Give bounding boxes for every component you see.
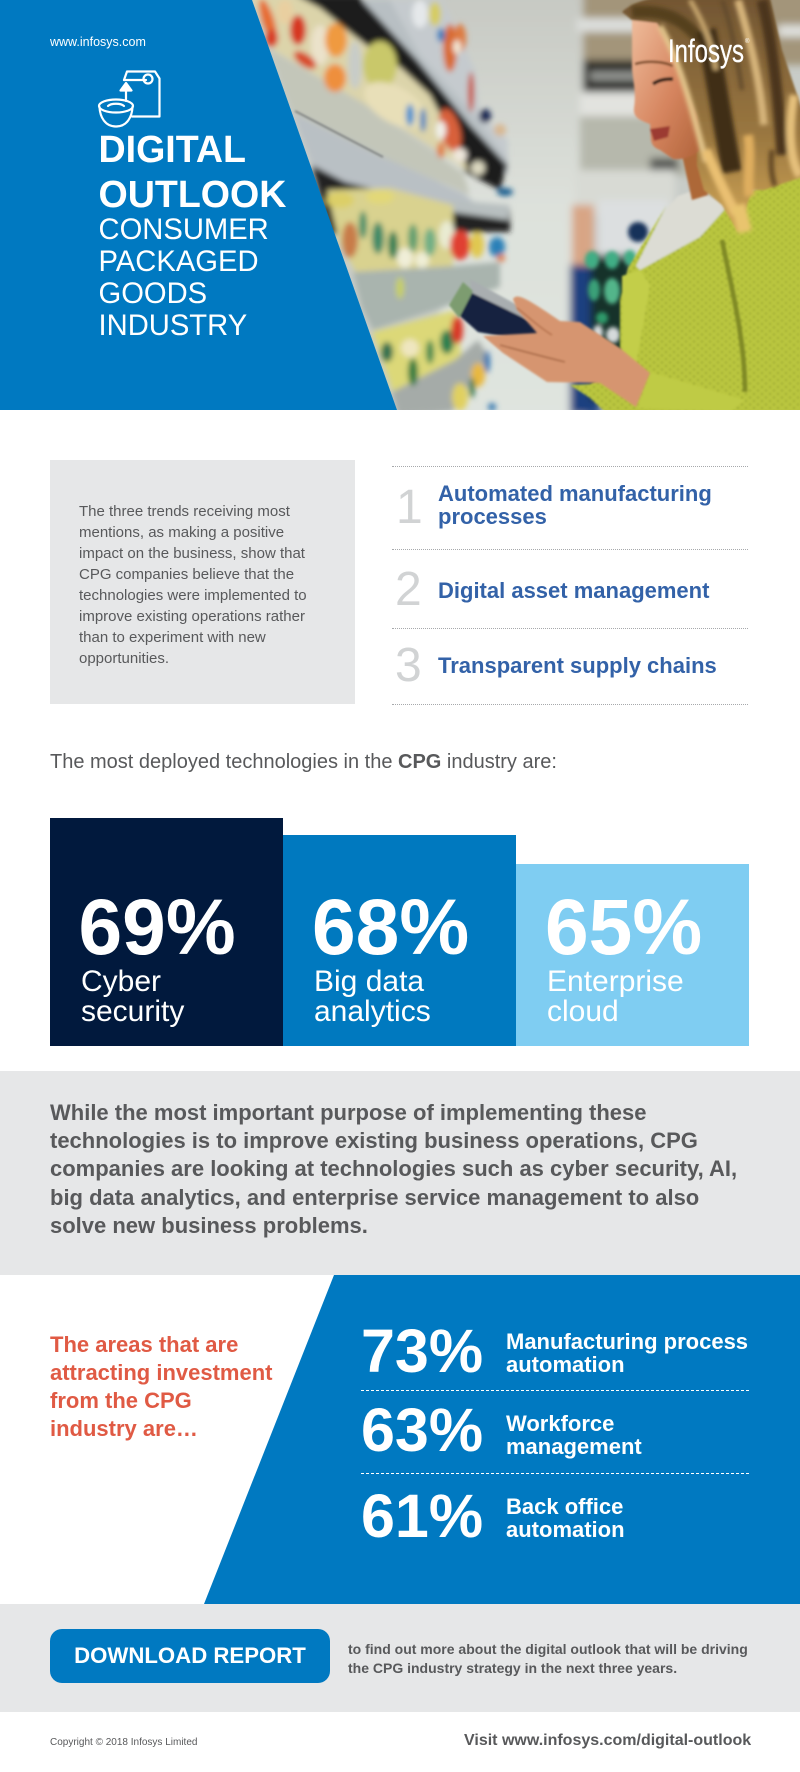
intro paragraph: technologies were implemented to [79, 587, 307, 604]
callout: areas attracting investment: The areas that are [50, 1332, 238, 1357]
stat: workforce management [361, 1396, 642, 1464]
trend 2 [395, 563, 710, 616]
stat: back office automation [361, 1482, 625, 1550]
call to action text [348, 1641, 748, 1676]
intro paragraph: CPG companies believe that the [79, 566, 294, 583]
bar: big data analytics 68%: analytics [314, 995, 431, 1028]
callout: areas attracting investment: from the CPG [50, 1388, 192, 1413]
figure: woman in yellow cardigan [449, 0, 800, 412]
trend 3: 3 [395, 639, 422, 692]
insight text: While the most important purpose of implementing these [50, 1100, 646, 1125]
insight text: big data analytics, and enterprise service management to also [50, 1185, 699, 1210]
intro paragraph: The three trends receiving most [79, 503, 290, 520]
title: INDUSTRY [98, 310, 247, 342]
panel: intro text box [50, 460, 355, 704]
stat: back office automation: automation [506, 1516, 625, 1542]
trend 2: Digital asset management [438, 578, 709, 603]
trend 1 [396, 481, 712, 534]
call to action text: the CPG industry strategy in the next three years. [348, 1660, 677, 1676]
bar: cyber security 69% [50, 818, 283, 1046]
bar: cyber security 69%: security [81, 995, 184, 1028]
heading: most deployed technologies: The most deployed technologies in the CPG industry are: [50, 751, 557, 773]
intro paragraph: mentions, as making a positive [79, 524, 284, 541]
trend 1: 1 [396, 481, 423, 534]
title [98, 128, 286, 342]
button: download report: DOWNLOAD REPORT [74, 1643, 306, 1668]
callout: areas attracting investment: attracting investment [50, 1360, 272, 1385]
callout: areas attracting investment [50, 1332, 272, 1441]
logo: Infosys: Infosys [668, 33, 744, 69]
title: CONSUMER [98, 214, 269, 246]
bar: enterprise cloud 65%: 65% [545, 883, 702, 971]
intro paragraph [79, 503, 307, 667]
panel: ranked trends list [392, 466, 748, 705]
stat: back office automation: Back office [506, 1494, 623, 1519]
insight text: technologies is to improve existing business operations, CPG [50, 1128, 698, 1153]
bar: big data analytics 68%: Big data [314, 965, 424, 998]
intro paragraph: impact on the business, show that [79, 545, 305, 562]
stat: workforce management: 63% [361, 1396, 483, 1464]
bar: enterprise cloud 65%: cloud [547, 995, 619, 1028]
trend 1: Automated manufacturing [438, 481, 712, 506]
bar: enterprise cloud 65%: Enterprise [547, 965, 684, 998]
intro paragraph: opportunities. [79, 650, 169, 667]
stat: manufacturing process automation: automation [506, 1352, 625, 1376]
photo: woman reading a package in a supermarket aisle [252, 0, 800, 410]
bar chart: most deployed technologies [50, 818, 749, 1046]
stat: workforce management: Workforce [506, 1411, 614, 1436]
title: DIGITAL [98, 128, 246, 170]
title: PACKAGED [98, 246, 259, 278]
hand [483, 297, 650, 407]
shelves and products [250, 0, 513, 415]
bar: cyber security 69%: Cyber [81, 965, 161, 998]
panel: key insight band [0, 1071, 800, 1275]
icon: yoghurt bowl and carton [98, 70, 161, 128]
stat: back office automation: 61% [361, 1482, 483, 1550]
button: download report [50, 1629, 330, 1683]
bar: big data analytics 68%: 68% [312, 883, 469, 971]
intro paragraph: than to experiment with new [79, 629, 266, 646]
trend 1: processes [438, 504, 547, 529]
bar: big data analytics 68% [283, 835, 516, 1046]
stat: manufacturing process automation: 73% [361, 1317, 483, 1385]
blue diagonal panel [0, 0, 397, 410]
insight text: companies are looking at technologies such as cyber security, AI, [50, 1156, 737, 1181]
stat: manufacturing process automation: Manufacturing process [506, 1329, 748, 1354]
packaged product in hand [449, 279, 548, 342]
panel: hero [0, 0, 800, 410]
bar: enterprise cloud 65% [516, 864, 749, 1046]
title: OUTLOOK [98, 173, 286, 215]
call to action text: to find out more about the digital outlook that will be driving [348, 1641, 748, 1657]
insight text [50, 1100, 737, 1238]
stat: manufacturing process automation [361, 1317, 748, 1385]
footer link: Visit www.infosys.com/digital-outlook [464, 1732, 751, 1749]
logo: Infosys: ® [745, 38, 750, 45]
background: store interior [440, 0, 800, 420]
insight text: solve new business problems. [50, 1213, 368, 1238]
panel: investment statistics [204, 1275, 800, 1604]
intro paragraph: improve existing operations rather [79, 608, 305, 625]
trend 3 [395, 639, 717, 692]
panel: call to action band [0, 1604, 800, 1712]
trend 3: Transparent supply chains [438, 653, 717, 678]
title: GOODS [98, 278, 207, 310]
callout: areas attracting investment: industry are… [50, 1416, 198, 1441]
copyright: Copyright © 2018 Infosys Limited [50, 1737, 197, 1748]
bar: cyber security 69%: 69% [78, 883, 236, 971]
trend 2: 2 [395, 563, 422, 616]
stat: workforce management: management [506, 1434, 642, 1458]
website url: www.infosys.com [50, 35, 146, 49]
